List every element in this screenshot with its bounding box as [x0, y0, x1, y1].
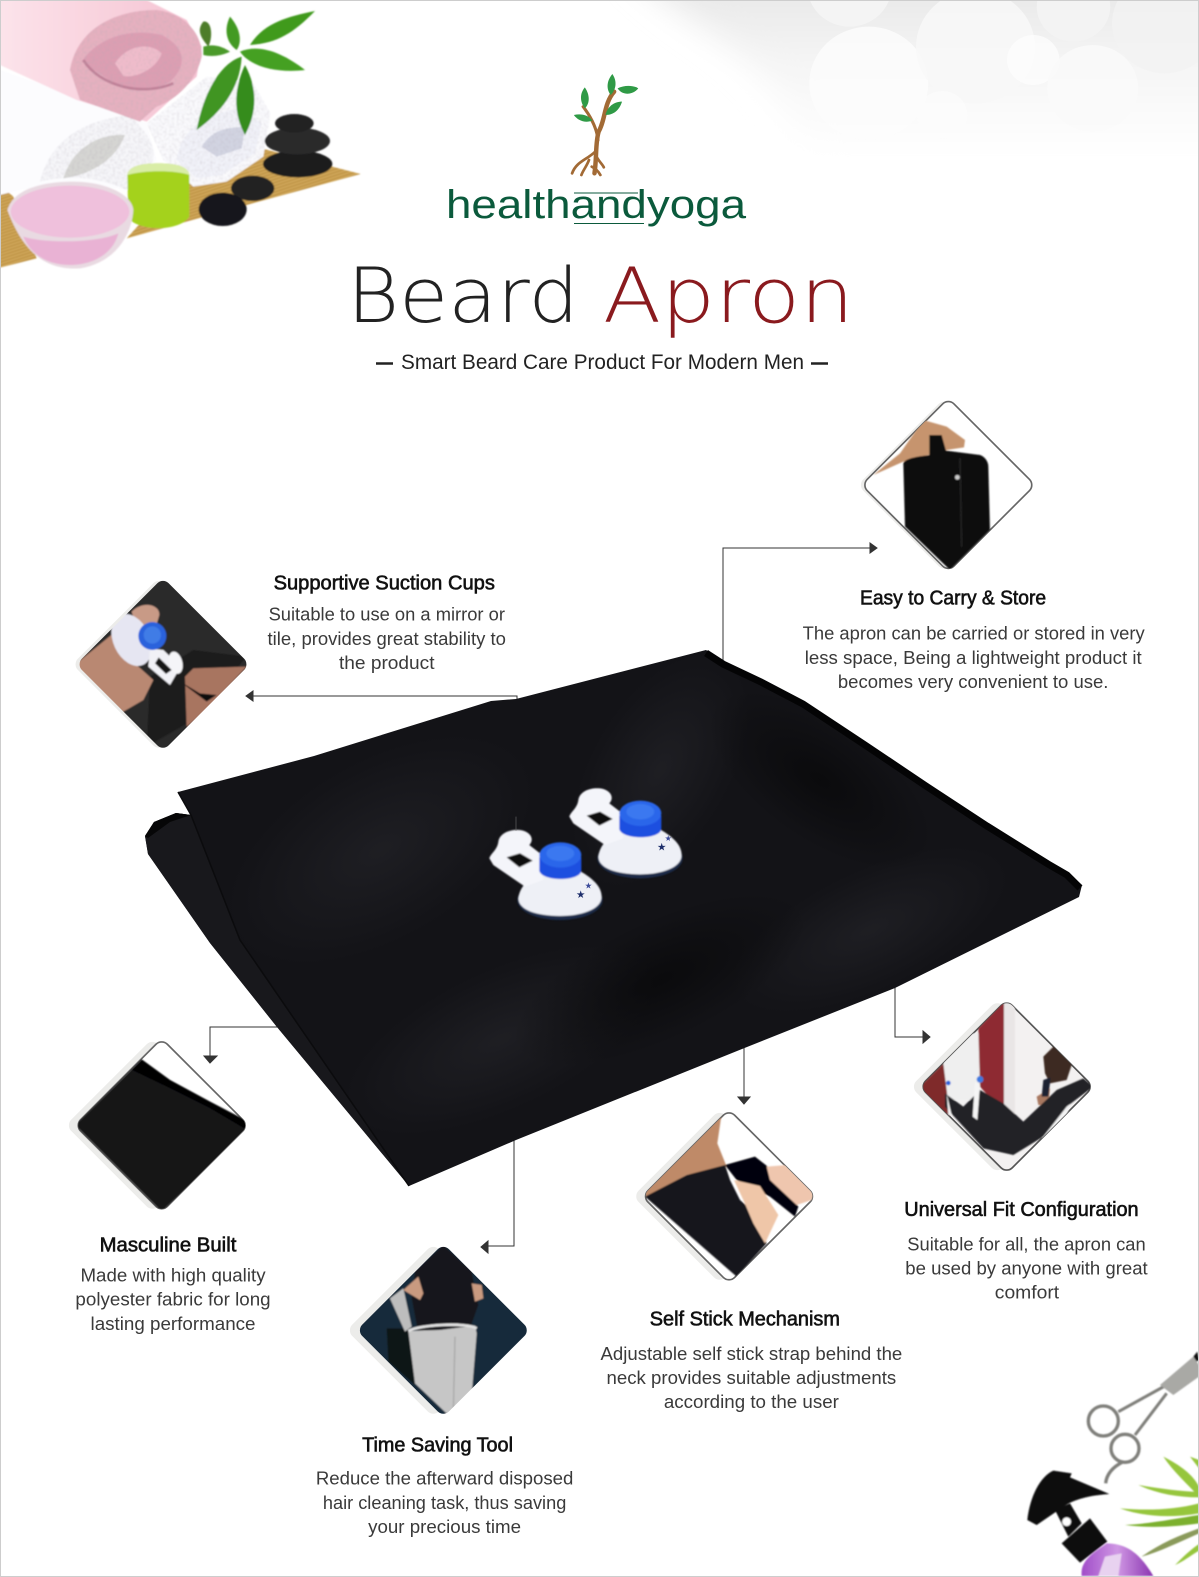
cup stars	[576, 834, 672, 901]
arrow: suction cups	[246, 691, 517, 701]
white towels	[0, 70, 157, 195]
arrow: masculine built	[204, 1027, 280, 1063]
description: Suitable to use on a mirror or	[269, 604, 505, 625]
heading: Universal Fit Configuration	[904, 1199, 1139, 1221]
description: polyester fabric for long	[75, 1289, 271, 1310]
description: be used by anyone with great	[905, 1257, 1149, 1278]
cup stars: ★	[665, 834, 672, 843]
heading: Masculine Built	[100, 1234, 237, 1256]
cup stars: ★	[585, 881, 592, 891]
arrow: self stick	[738, 1048, 750, 1104]
apron left fold	[145, 813, 409, 1186]
apron hem	[706, 653, 1080, 888]
bamboo leaves	[200, 22, 211, 47]
description	[905, 1233, 1149, 1303]
diamond photo: neck strap adjustment	[633, 1110, 816, 1283]
diamond photo: black fabric	[66, 1039, 248, 1212]
decorative bokeh top right	[629, 0, 1199, 187]
description	[75, 1264, 271, 1334]
heading: Time Saving Tool	[362, 1434, 513, 1456]
subtitle dashes	[376, 362, 828, 365]
logo wordmark: healthandyoga	[446, 183, 747, 227]
fine line on apron	[515, 817, 517, 831]
description	[803, 623, 1145, 692]
spa photo top left	[0, 0, 361, 269]
barber tools photo bottom right	[1027, 1352, 1199, 1576]
suction cup: front	[489, 830, 603, 920]
spray head	[1027, 1471, 1109, 1525]
scissors	[1088, 1385, 1167, 1483]
diamond photo: apron emptied into bin	[350, 1246, 527, 1414]
description: according to the user	[664, 1391, 839, 1412]
description: Suitable for all, the apron can	[907, 1233, 1146, 1254]
description: tile, provides great stability to	[268, 628, 506, 649]
description	[316, 1468, 573, 1537]
callout: supportive suction cups	[72, 572, 506, 753]
pink towel	[0, 0, 202, 122]
cup stars: ★	[576, 889, 586, 901]
apron folds and sheen	[188, 622, 1031, 1175]
apron body	[145, 650, 1082, 1186]
diamond photo: man using apron	[911, 1000, 1093, 1173]
logo: healthandyoga	[446, 74, 747, 227]
callout: masculine built	[66, 1039, 271, 1334]
heading: Supportive Suction Cups	[274, 572, 495, 594]
description	[601, 1343, 902, 1412]
description: less space, Being a lightweight product it	[805, 647, 1142, 668]
description: neck provides suitable adjustments	[607, 1367, 896, 1388]
description: lasting performance	[91, 1313, 255, 1334]
description: your precious time	[368, 1516, 521, 1537]
apron product photo	[145, 622, 1082, 1186]
green jar	[127, 163, 189, 228]
callout: easy to carry and store	[803, 398, 1145, 692]
leader arrows	[204, 543, 930, 1253]
description: comfort	[995, 1282, 1060, 1303]
description: the product	[339, 652, 435, 673]
plant	[1120, 1457, 1199, 1565]
pink salt bowl	[7, 182, 133, 269]
cup stars: ★	[657, 842, 667, 854]
title word: Beard: Beard	[347, 251, 579, 340]
description: becomes very convenient to use.	[838, 671, 1108, 692]
stones	[263, 151, 332, 177]
arrow: easy to carry	[723, 543, 877, 662]
bottle	[1082, 1543, 1153, 1576]
bamboo mat	[0, 148, 361, 268]
callout: self stick mechanism	[601, 1110, 902, 1412]
diamond photo: hand carrying folded apron	[858, 398, 1035, 572]
description: Made with high quality	[80, 1264, 266, 1285]
diamond photo: suction cups in hand	[76, 580, 246, 748]
heading: Easy to Carry & Store	[860, 588, 1046, 610]
title	[347, 251, 854, 340]
title word: Apron: Apron	[603, 251, 854, 340]
description: Reduce the afterward disposed	[316, 1468, 573, 1489]
subtitle text: Smart Beard Care Product For Modern Men	[401, 351, 804, 374]
description: hair cleaning task, thus saving	[323, 1492, 566, 1513]
icon: tree	[572, 74, 638, 175]
wordmark rules around and	[574, 193, 644, 224]
description	[268, 604, 506, 673]
suction cups photo	[489, 788, 683, 920]
heading: Self Stick Mechanism	[650, 1309, 840, 1331]
arrow: universal fit	[895, 986, 930, 1043]
callout: time saving tool	[316, 1242, 573, 1537]
description: Adjustable self stick strap behind the	[601, 1343, 902, 1364]
description: The apron can be carried or stored in very	[803, 623, 1145, 644]
arrow: time saving	[481, 1138, 514, 1253]
callout: universal fit configuration	[904, 1000, 1149, 1303]
suction cup: back	[569, 788, 683, 878]
